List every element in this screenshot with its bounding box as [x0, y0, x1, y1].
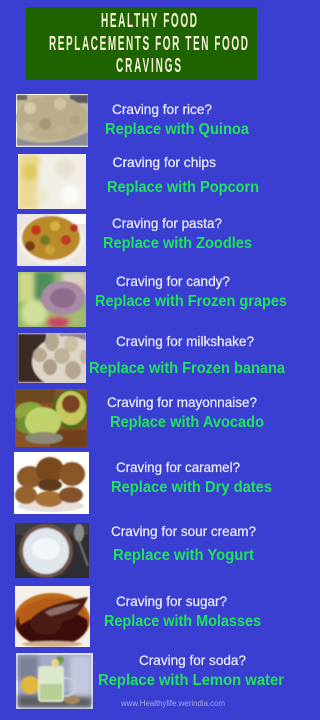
replacement text: Replace with Dry dates: [111, 479, 272, 496]
title text: CRAVINGS: [116, 56, 181, 77]
row 5: milkshake to frozen banana: [18, 333, 285, 388]
photo: popcorn: [18, 154, 86, 209]
replacement text: Replace with Zoodles: [103, 235, 252, 252]
footer website: www.Healthylife.werindia.com: [120, 699, 225, 708]
craving text: Craving for milkshake?: [116, 333, 254, 349]
craving text: Craving for caramel?: [116, 459, 240, 475]
replacement text: Replace with Popcorn: [107, 179, 259, 196]
row 8: sour cream to yogurt: [15, 523, 256, 578]
row 4: candy to frozen grapes: [18, 272, 287, 328]
craving text: Craving for mayonnaise?: [107, 394, 257, 410]
replacement text: Replace with Yogurt: [113, 547, 254, 564]
photo: frozen banana: [18, 333, 86, 383]
craving text: Craving for candy?: [116, 273, 230, 289]
title text: REPLACEMENTS FOR TEN FOOD: [49, 34, 248, 55]
replacement text: Replace with Lemon water: [98, 672, 284, 689]
row 6: mayonnaise to avocado: [15, 389, 264, 447]
photo: dry dates: [14, 452, 89, 514]
craving text: Craving for pasta?: [112, 215, 222, 231]
photo: lemon water: [16, 653, 93, 709]
row 10: soda to lemon water: [16, 652, 284, 709]
title text: HEALTHY FOOD: [101, 11, 197, 32]
photo: frozen grapes: [18, 272, 86, 328]
craving text: Craving for sour cream?: [111, 523, 256, 539]
row 9: sugar to molasses: [14, 586, 261, 647]
replacement text: Replace with Avocado: [110, 414, 264, 431]
replacement text: Replace with Quinoa: [105, 121, 249, 138]
photo: zoodles: [17, 214, 86, 266]
row 7: caramel to dry dates: [14, 452, 272, 514]
row 3: pasta to zoodles: [17, 214, 252, 266]
row 2: chips to popcorn: [18, 154, 259, 209]
photo: yogurt: [15, 523, 89, 578]
photo: avocado: [15, 389, 89, 447]
replacement text: Replace with Molasses: [104, 613, 261, 630]
photo: quinoa: [16, 94, 88, 147]
title banner: [26, 7, 257, 80]
craving text: Craving for rice?: [112, 101, 212, 117]
craving text: Craving for soda?: [139, 652, 246, 668]
craving text: Craving for sugar?: [116, 593, 227, 609]
title text: [49, 11, 248, 77]
photo: molasses: [14, 586, 90, 647]
craving text: Craving for chips: [112, 154, 216, 170]
row 1: rice to quinoa: [16, 94, 249, 147]
